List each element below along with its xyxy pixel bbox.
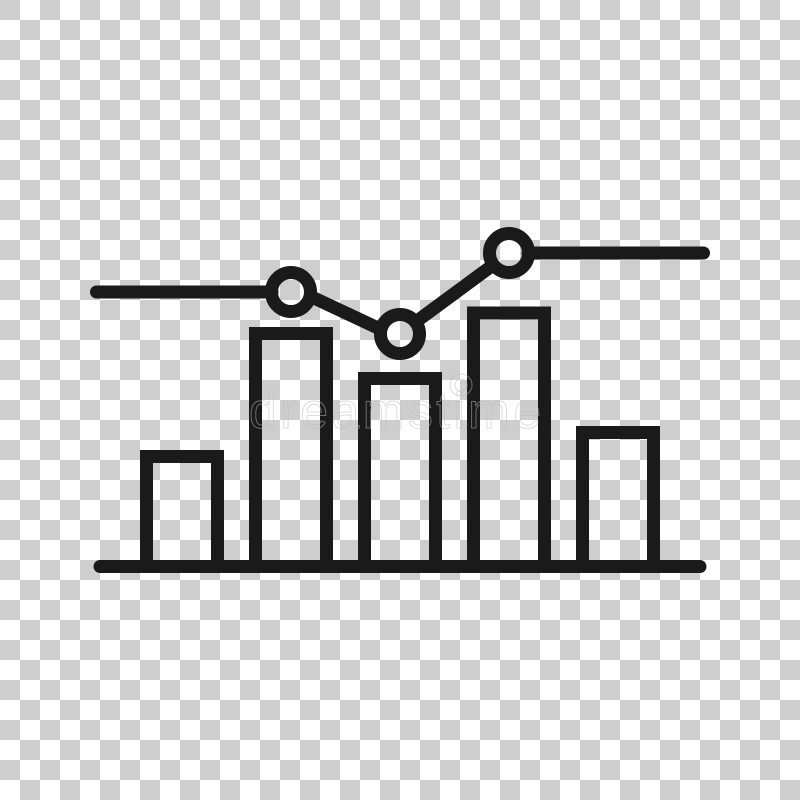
trend point 2 xyxy=(380,314,420,354)
trend point 1 xyxy=(272,272,310,312)
trend line xyxy=(96,253,704,329)
bar 1 xyxy=(146,456,218,566)
bar 2 xyxy=(256,334,326,566)
bar 5 xyxy=(582,432,654,566)
trend point 3 xyxy=(490,234,528,272)
chart icon xyxy=(96,234,704,566)
bar 4 xyxy=(474,313,544,566)
bar 3 xyxy=(364,378,436,566)
baseline axis xyxy=(100,560,700,573)
watermark: dreamstime xyxy=(249,383,541,439)
